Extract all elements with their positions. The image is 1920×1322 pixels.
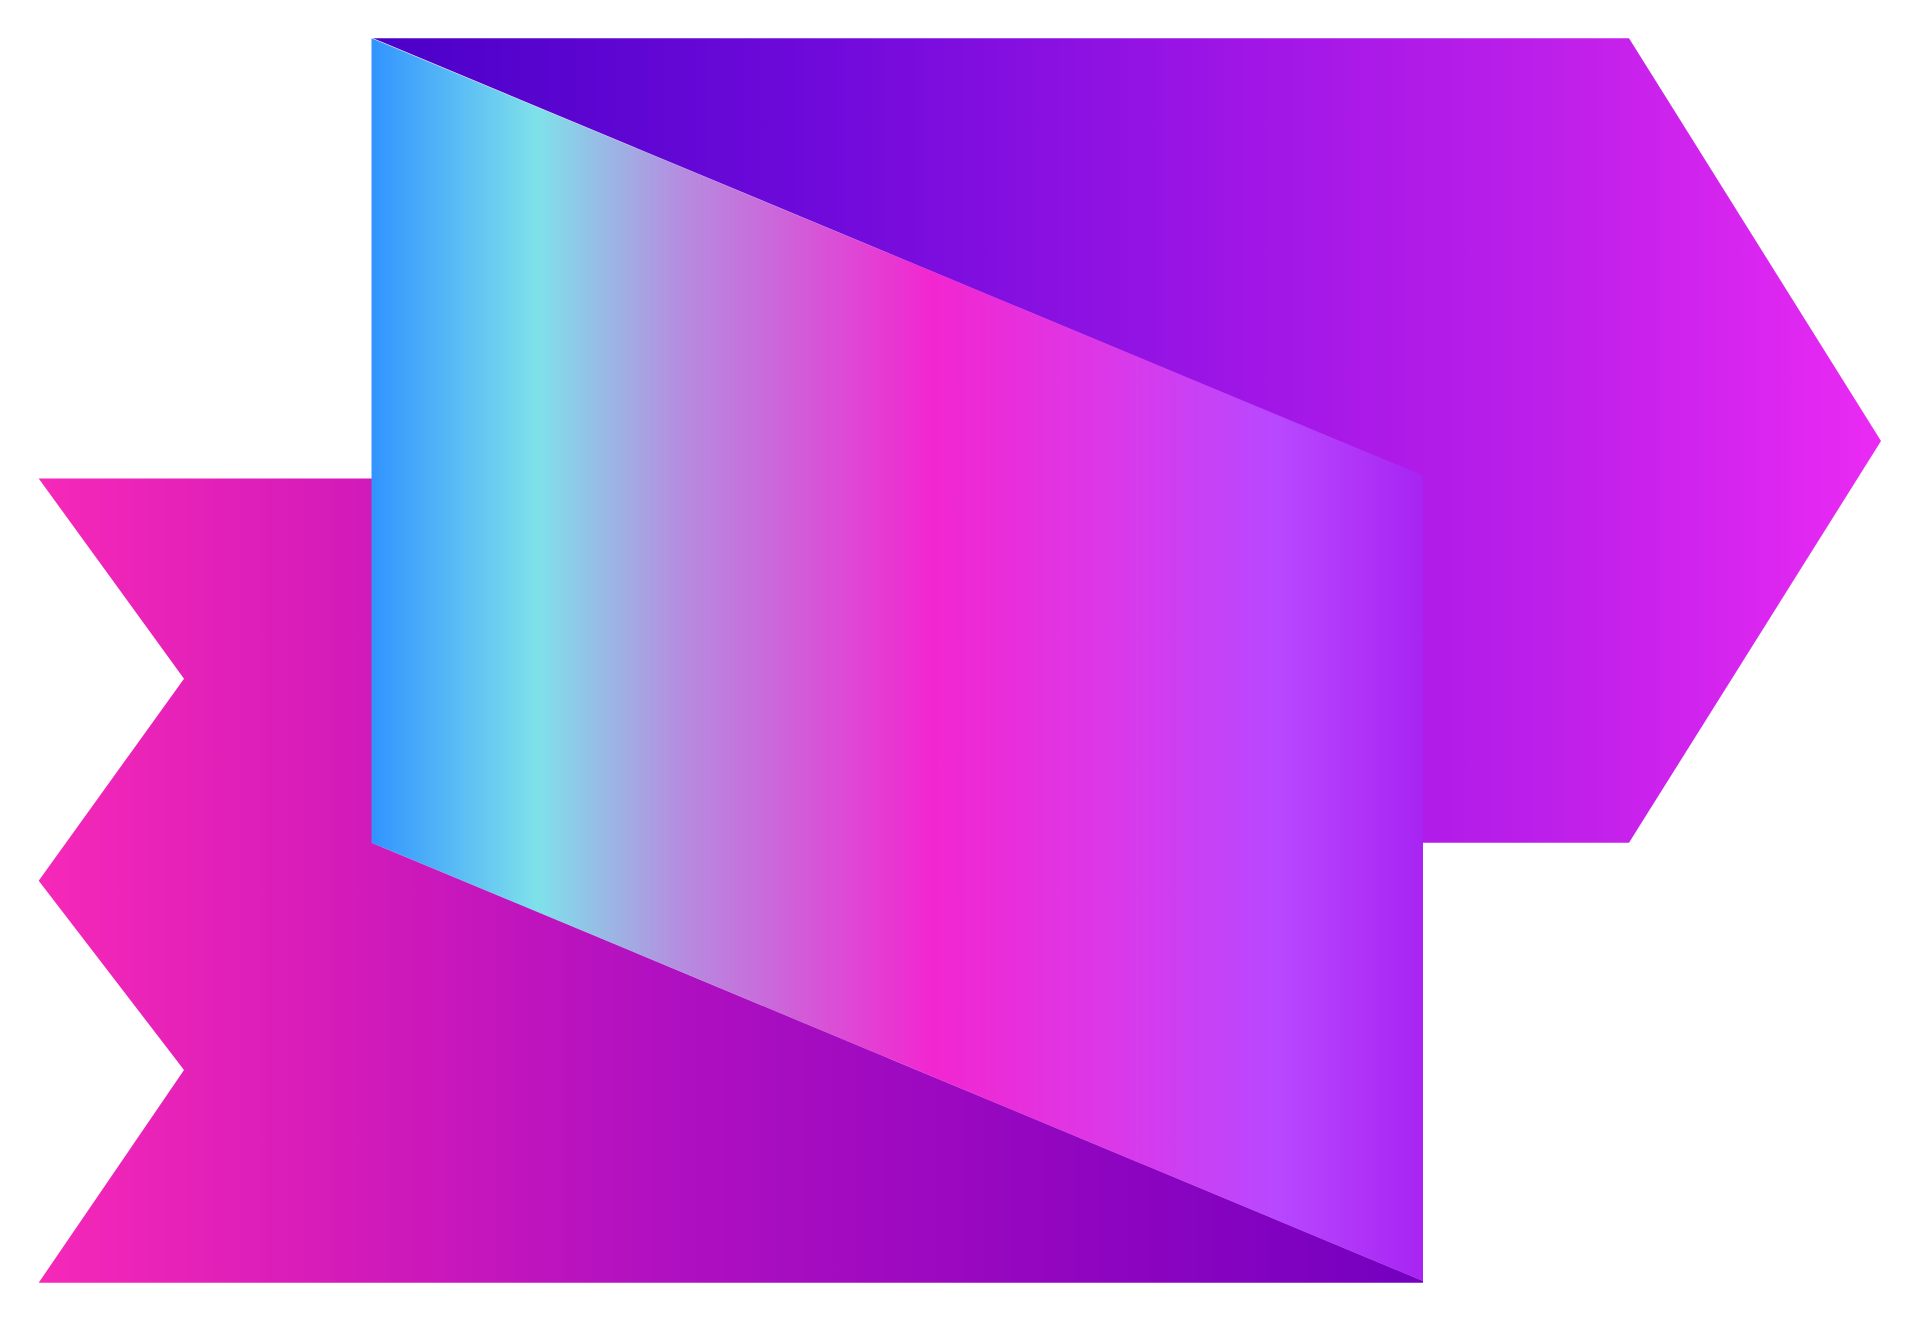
top right arrow ribbon bbox=[373, 38, 1881, 843]
center folded gradient panel bbox=[372, 38, 1423, 1281]
bottom left notched ribbon bbox=[39, 478, 1423, 1283]
